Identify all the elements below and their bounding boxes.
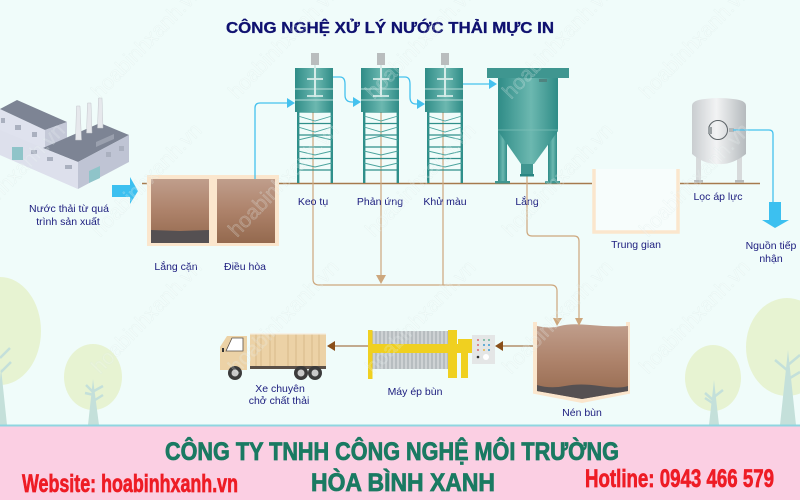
icon: factory [0, 98, 129, 189]
watermark: hoabinhxanh.vn [498, 256, 618, 378]
company name: HÒA BÌNH XANH [311, 467, 495, 497]
arrow: inflow [112, 177, 138, 204]
company name: CÔNG TY TNHH CÔNG NGHỆ MÔI TRƯỜNG [165, 436, 619, 466]
pressure filter [692, 98, 746, 182]
label: truck: Xe chuyên [255, 383, 305, 395]
outlet pipe and arrow [733, 130, 789, 228]
ground pipe [142, 182, 760, 184]
watermark: hoabinhxanh.vn [87, 119, 207, 241]
label: Máy ép bùn: Máy ép bùn [388, 386, 443, 398]
label: Lọc áp lực: Lọc áp lực [693, 191, 743, 203]
filter press [368, 330, 495, 379]
tank: Lắng cặn [147, 175, 212, 246]
blue process pipes [255, 77, 490, 179]
label: Lắng: Lắng [515, 195, 539, 208]
label: Nguồn tiếp nhận [746, 240, 797, 265]
arrowheads: tan [376, 275, 583, 326]
reactor: Phản ứng [361, 53, 399, 183]
watermark: hoabinhxanh.vn [361, 119, 481, 241]
label: factory: trình sản xuất [36, 216, 100, 228]
label: Nguồn tiếp nhận: nhận [759, 253, 783, 265]
arrow: press to truck [327, 341, 368, 351]
settling tank: Lắng [487, 68, 569, 184]
tank: Nén bùn [535, 322, 628, 401]
tank: Trung gian [594, 169, 678, 232]
footer panel [0, 424, 800, 500]
watermark [0, 0, 755, 378]
company name [165, 436, 619, 497]
label: Nén bùn: Nén bùn [562, 407, 602, 419]
label: factory: Nước thải từ quá [29, 203, 109, 215]
tank: Điều hòa [212, 175, 279, 246]
watermark: hoabinhxanh.vn [224, 256, 344, 378]
label: Nguồn tiếp nhận: Nguồn tiếp [746, 240, 797, 252]
watermark: hoabinhxanh.vn [498, 119, 618, 241]
reactor: Keo tụ [295, 53, 333, 183]
watermark: hoabinhxanh.vn [224, 119, 344, 241]
label: Trung gian: Trung gian [611, 239, 661, 251]
website: Website: hoabinhxanh.vn [22, 470, 238, 498]
watermark: hoabinhxanh.vn [635, 256, 755, 378]
watermark: hoabinhxanh.vn [361, 256, 481, 378]
reactor: Khử màu [425, 53, 463, 183]
watermark: hoabinhxanh.vn [87, 256, 207, 378]
label: Khử màu: Khử màu [423, 196, 467, 208]
arrowheads: blue [287, 79, 497, 109]
title: CÔNG NGHỆ XỬ LÝ NƯỚC THẢI MỰC IN [226, 18, 554, 37]
tan sludge pipes [313, 112, 579, 318]
arrow: tank to press [495, 341, 533, 351]
watermark: hoabinhxanh.vn [635, 119, 755, 241]
label: factory [29, 203, 109, 228]
icon: truck [220, 333, 326, 380]
decorative trees [0, 277, 800, 425]
label: truck: chở chất thải [249, 395, 309, 407]
label: Phản ứng: Phản ứng [357, 196, 403, 208]
label: Điều hòa: Điều hòa [224, 261, 266, 273]
label: Keo tụ: Keo tụ [298, 196, 328, 208]
label: Lắng cặn: Lắng cặn [154, 260, 198, 273]
label: truck [249, 383, 309, 407]
